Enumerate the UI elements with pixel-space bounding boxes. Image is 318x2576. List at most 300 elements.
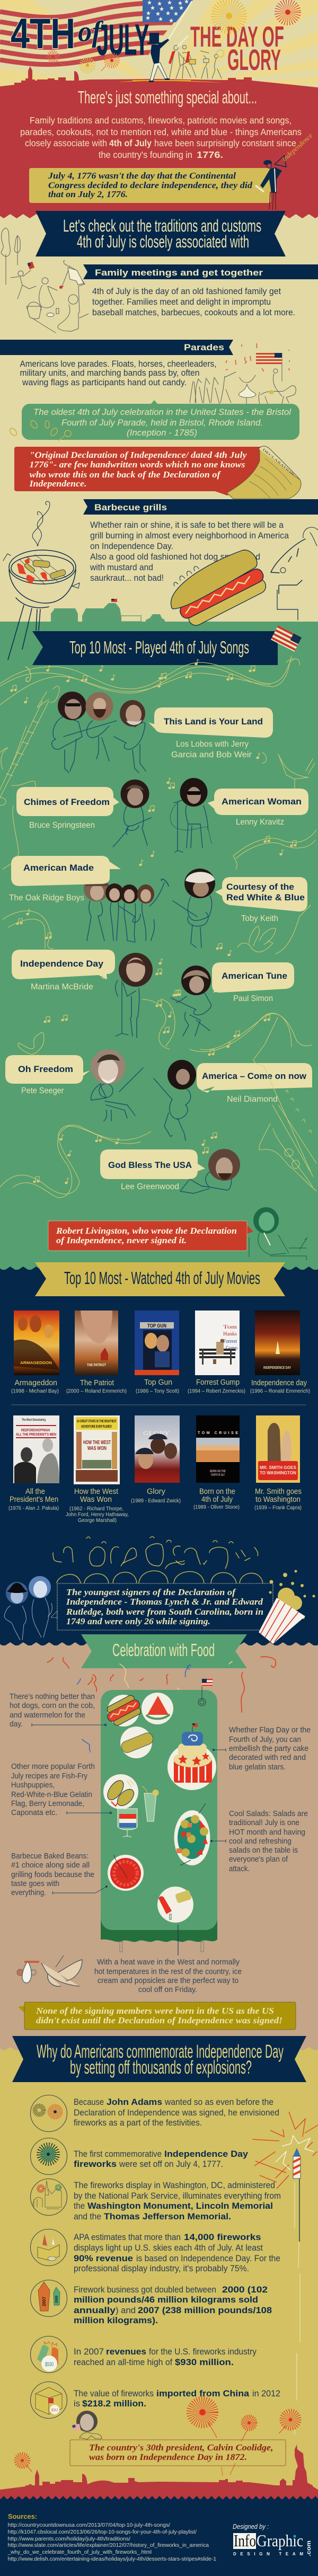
- poster: TO WASHINGTON: [260, 1471, 296, 1475]
- text block: hot dogs: There's nothing better than: [10, 1693, 95, 1701]
- song: Courtesy of the Red White & Blue: [173, 869, 307, 948]
- movie: How the West Was Won: How the West: [74, 1487, 119, 1496]
- singer illustration: [170, 800, 212, 852]
- song: American Tune: American Tune: [222, 971, 287, 981]
- callout: youngest signers: Rutledge, both were from South Carolina, born in: [66, 1607, 263, 1617]
- portraits: Oak Ridge Boys: [84, 876, 154, 904]
- decorative zigzag top of tan: [0, 1642, 318, 1646]
- song: American Tune: [171, 962, 294, 1036]
- parade flag: [256, 353, 282, 364]
- fact: business doubled: ) and: [116, 2306, 136, 2315]
- poster: TOM CRUISE: [198, 1431, 238, 1435]
- poster: GLORY: [143, 1429, 170, 1437]
- fact: Washington display: the: [74, 2201, 85, 2211]
- fact: China imports: is: [74, 2399, 80, 2409]
- icon: flag toothpick: [198, 1679, 213, 1706]
- movie: Independence Day: [250, 1311, 310, 1394]
- text block: parades: Americans love parades. Floats, horses, cheerleaders,: [20, 359, 216, 369]
- movie: Top Gun: [135, 1311, 179, 1394]
- poster: ARMAGEDDON: [20, 1361, 52, 1365]
- illustration: bird and clef: [257, 753, 315, 790]
- movie: How the West Was Won: [66, 1415, 129, 1524]
- song: This Land is Your Land: This Land is Your Land: [164, 716, 263, 727]
- song: God Bless The USA: Lee Greenwood: [121, 1182, 179, 1191]
- fact: John Adams: Because: [74, 2097, 104, 2107]
- guitarist illustration: [173, 896, 212, 948]
- movie: The Patriot: (2000 – Roland Emmerich): [66, 1388, 127, 1394]
- banner: traditions heading: [36, 211, 286, 256]
- decorative cream zigzag over red: [0, 214, 318, 218]
- section: green songs background: [0, 622, 318, 1271]
- reclining figure illustration: [180, 1170, 232, 1193]
- icon: monuments badge: [31, 2179, 67, 2215]
- song: American Tune: Paul Simon: [233, 994, 273, 1003]
- portrait: Paul Simon: [181, 966, 211, 995]
- text block: baked beans: grilling foods because the: [11, 1871, 94, 1879]
- callout: declaration red box: [14, 447, 262, 495]
- callout: signing members: didn't exist until the Declaration of Independence was signed!: [36, 2015, 282, 2025]
- movie: All the President's Men: President's Men: [10, 1495, 58, 1504]
- text block: recipes: Red-White-n-Blue Gelatin: [11, 1791, 92, 1799]
- illustration: parade with flag and horse: [190, 343, 296, 405]
- fact: China imports: $218.2 million.: [82, 2399, 146, 2409]
- poster: TOP GUN: [147, 1323, 166, 1329]
- text block: parades: waving flags as participants hand out candy.: [22, 378, 187, 387]
- text block: recipes: July recipes are Fish-Fry: [11, 1772, 88, 1781]
- callout: July 4 fact: that on July 2, 1776.: [48, 189, 128, 199]
- callout: Robert Livingston: of Independence, never signed it.: [56, 1235, 187, 1245]
- icon: declaration scroll: DECLARATION: [262, 448, 295, 477]
- poster: [13, 1415, 59, 1483]
- fact: business doubled: million kilograms).: [74, 2316, 158, 2325]
- divider: movie rows: [12, 1404, 306, 1405]
- text block: intro: closely associate with: [25, 138, 107, 148]
- callout: oldest celebration: Fourth of July Parade, held in Bristol, Rhode Island.: [61, 418, 263, 428]
- header: marching band illustration: [118, 1, 224, 83]
- sources block: http://k1047.cbslocal.com/2013/06/26/top-10-songs-for-your-4th-of-july-playlist/: [7, 2529, 197, 2535]
- movie: Armageddon: [11, 1311, 59, 1394]
- poster: THE PATRIOT: [87, 1364, 107, 1367]
- portrait: Neil Diamond: [167, 1060, 196, 1090]
- callout: oldest celebration: The oldest 4th of July celebration in the United States - the Bristol: [33, 407, 292, 417]
- fact: first fireworks: [31, 2138, 249, 2175]
- song: America Come on now: Neil Diamond: [227, 1095, 278, 1104]
- icon: baby Calvin Coolidge: [72, 2411, 102, 2439]
- fact: John Adams: fireworks as a part of the festivities.: [74, 2118, 202, 2128]
- fact: John Adams: Declaration of Independence was signed, he envisioned: [74, 2108, 279, 2118]
- poster: [14, 1311, 59, 1375]
- icon: money bag badge: $930: [45, 2361, 54, 2368]
- decorative zigzag top of navy: [0, 1267, 318, 1271]
- sources block: _why_do_we_celebrate_fourth_of_july_with_fireworks_.html: [7, 2549, 152, 2555]
- fact: China imports: in 2012: [252, 2389, 280, 2398]
- movie: The Patriot: [66, 1311, 127, 1394]
- callout: signing members: None of the signing members were born in the US as the US: [36, 2006, 274, 2016]
- song: Chimes of Freedom: Chimes of Freedom: [24, 797, 110, 807]
- trumpet player: [169, 36, 188, 78]
- callout: July 4 fact: Congress decided to declare independence, they did: [48, 180, 253, 190]
- text block: salads: attack.: [229, 1865, 250, 1873]
- mini flag: [28, 262, 34, 269]
- text block: baked beans: Barbecue Baked Beans:: [11, 1852, 89, 1861]
- movie: Armageddon: (1998 - Michael Bay): [11, 1388, 59, 1394]
- song: Courtesy of the Red White & Blue: Red White & Blue: [226, 892, 305, 902]
- song: Independence Day: [12, 950, 153, 1038]
- portrait: Martina McBride: [119, 953, 153, 987]
- poster: WAS WON: [87, 1446, 107, 1451]
- movie: Top Gun: Top Gun: [144, 1378, 172, 1387]
- song: This Land is Your Land: Los Lobos with Jerry: [176, 740, 249, 749]
- callout: Robert Livingston: Robert Livingston, who wrote the Declaration: [56, 1226, 237, 1236]
- icon: box from China badge: $218.2: [51, 2409, 58, 2412]
- speech bubble: [148, 707, 273, 738]
- illustration: staff lines and small notes: [18, 959, 312, 1060]
- poster: [195, 1311, 240, 1375]
- poster: [255, 1311, 300, 1375]
- text block: parades: [20, 359, 216, 387]
- text block: family: [92, 287, 295, 317]
- text block: barbecue: saurkraut... not bad!: [90, 573, 164, 583]
- text block: barbecue: Whether rain or shine, it is safe to bet there will be a: [90, 520, 284, 530]
- callout: Calvin Coolidge: [70, 2440, 286, 2466]
- plate: corn: [120, 1727, 155, 1758]
- movie: Independence Day: (1996 – Ronald Emmerich): [250, 1388, 310, 1394]
- fact: first fireworks: were set off on July 4, 1777.: [119, 2159, 223, 2169]
- subtitle: The Day of Glory: [190, 20, 284, 76]
- text block: salads: cool and refreshing: [229, 1837, 292, 1846]
- movie: Born on the 4th of July: (1989 - Oliver Stone): [193, 1504, 240, 1510]
- text block: cake: embellish the party cake: [229, 1745, 308, 1753]
- movie: Mr. Smith goes to Washington: Mr. Smith goes: [255, 1487, 302, 1496]
- text block: cake: decorated with red and: [229, 1754, 306, 1762]
- movie: Independence Day: Independence day: [251, 1378, 307, 1387]
- callout: declaration red box: "Original Declaration of Independence/ dated 4th July: [30, 450, 247, 460]
- icon: candies: [8, 420, 71, 441]
- icon: rocket burst: [252, 2112, 318, 2435]
- text block: recipes: Caponata etc.: [11, 1809, 57, 1817]
- text block: family: baseball matches, barbecues, cookouts and a lot more.: [92, 308, 295, 317]
- portrait: Bob Weir: [120, 700, 145, 727]
- text block: salads: HOT month and having: [229, 1828, 305, 1837]
- musicians illustration: [52, 716, 146, 773]
- fact: revenues: reached an all-time high of: [74, 2358, 172, 2367]
- movie: Born on the 4th of July: [193, 1415, 240, 1510]
- illustration: hot dog: [160, 540, 271, 632]
- poster: INDEPENDENCE DAY: [263, 1366, 291, 1370]
- song: This Land is Your Land: Garcia and Bob Weir: [171, 750, 252, 759]
- footer: navy background: [0, 2499, 318, 2576]
- song: Courtesy of the Red White & Blue: Toby Keith: [241, 914, 278, 923]
- poster: Gump: [226, 1345, 237, 1351]
- icon: fireworks badge: [31, 2095, 67, 2131]
- poster: ALL THE PRESIDENT'S MEN: [16, 1433, 56, 1437]
- portrait: Lenny Kravitz: [180, 778, 208, 807]
- flag pole: [169, 1, 192, 39]
- fact: China imports: imported from China: [156, 2389, 250, 2398]
- fact: revenues: [31, 2336, 257, 2373]
- text block: cake: Whether Flag Day or the: [229, 1726, 311, 1734]
- seated banjo player illustration: [91, 1068, 143, 1121]
- drummer: [182, 46, 196, 78]
- icon: rockets badge: 2000: [55, 2296, 59, 2303]
- callout: declaration red box: who wrote this on the back of the Declaration of: [30, 470, 222, 480]
- plate: fish fry: [103, 1774, 138, 1809]
- header: sun rays: [0, 0, 318, 90]
- plate: cake: [167, 1723, 216, 1790]
- plate: salad: [174, 1803, 210, 1865]
- fact: China imports: [31, 2382, 280, 2419]
- illustration: guitar neck left: [0, 686, 59, 869]
- movie: Glory: [131, 1415, 181, 1504]
- text block: salads: everyone's plan of: [229, 1855, 288, 1864]
- icon: popcorn box: [259, 1570, 315, 1644]
- icon: box of fireworks badge: [31, 2229, 67, 2266]
- fact: China imports: The value of fireworks: [74, 2389, 154, 2398]
- tuba player: [212, 50, 224, 78]
- poster: BORN ON THE: [210, 1470, 226, 1473]
- movie: All the President's Men: (1976 - Alan J. Pakula): [8, 1505, 59, 1511]
- singer illustration: [116, 980, 139, 1038]
- movie: Mr. Smith goes to Washington: [254, 1415, 302, 1511]
- decorative zigzag red to navy: [0, 2496, 318, 2500]
- text block: cake: Fourth of July, you can: [229, 1736, 301, 1744]
- illustration: theater audience: [53, 1537, 263, 1583]
- icon: money bag badge: [31, 2336, 67, 2373]
- designer logo: Designed by :: [233, 2522, 269, 2530]
- song: God Bless The USA: [100, 1149, 240, 1193]
- glass: gelatin flag: [118, 1809, 137, 1837]
- designer logo: DESIGN TEAM: [233, 2552, 303, 2556]
- text block: recipes: Hushpuppies,: [11, 1781, 55, 1790]
- guitarist illustration: [154, 1078, 191, 1140]
- fact: Washington display: Washington Monument, Lincoln Memorial: [87, 2201, 273, 2211]
- portrait: Bruce Springsteen: [121, 780, 149, 808]
- callout: oldest celebration: (Inception - 1785): [127, 428, 197, 438]
- decorative zigzag top of yellow: [0, 2047, 318, 2051]
- text block: ice cream: cool off on Friday.: [138, 1986, 197, 1994]
- movie: Forrest Gump: (1994 – Robert Zemeckis): [188, 1388, 245, 1394]
- song: America Come on now: [154, 1060, 312, 1140]
- standing father: [61, 261, 85, 313]
- illustration: lines and dove: [3, 905, 311, 956]
- fact: revenues: revenues: [106, 2347, 146, 2357]
- callout: youngest signers: The youngest signers of the Declaration of: [66, 1587, 236, 1597]
- song: American Woman: [170, 778, 308, 852]
- icon: rockets badge: [31, 2280, 67, 2317]
- poster: [256, 1415, 300, 1483]
- banner: Celebration with Food: [81, 1634, 247, 1668]
- song: American Made: [9, 856, 169, 942]
- fact: business doubled: 2007 (238 million pounds/108: [138, 2306, 272, 2315]
- song: Oh Freedom: Pete Seeger: [21, 1086, 64, 1095]
- seated child: [68, 295, 78, 304]
- banner: Top 10 songs: [32, 631, 278, 665]
- movie: Armageddon: Armageddon: [15, 1378, 57, 1387]
- fact: first fireworks: fireworks: [74, 2159, 117, 2169]
- section: yellow fireworks background: [0, 2050, 318, 2495]
- sources block: [7, 2512, 216, 2562]
- callout: declaration red box: Independence.: [29, 479, 87, 489]
- text block: barbecue: with mustard and: [90, 563, 153, 572]
- table with foods: [101, 1679, 217, 1952]
- movie: Forrest Gump: [188, 1311, 245, 1394]
- callout: oldest celebration: [22, 400, 299, 440]
- icon: confetti: [47, 1657, 276, 1752]
- text block: cake: blue gelatin stars.: [229, 1763, 286, 1772]
- text block: intro: the country's founding in: [99, 149, 192, 160]
- movie: How the West Was Won: Was Won: [80, 1495, 112, 1504]
- text block: hot dogs: hot dogs, corn on the cob,: [10, 1702, 95, 1710]
- icon: man with megaphone: independence: [280, 131, 314, 163]
- song: Oh Freedom: [5, 1049, 143, 1121]
- fact: first fireworks: Independence Day: [164, 2149, 249, 2159]
- illustration: lower-left staff: [0, 1125, 217, 1198]
- title: 4TH of JULY: of: [78, 15, 104, 48]
- illustration: family picnic: [11, 261, 89, 333]
- poster: Tom: [223, 1324, 237, 1330]
- banner: Parades: Parades: [184, 342, 224, 352]
- fact: APA estimates: [31, 2229, 280, 2273]
- callout: Calvin Coolidge: was born on Independence Day in 1872.: [89, 2452, 247, 2462]
- text block: baked beans: everything.: [11, 1889, 46, 1897]
- bird: [18, 1032, 44, 1060]
- illustration: saxophone: [253, 1017, 316, 1191]
- header: flag with waving stripes: [0, 0, 193, 65]
- tablecloth: [101, 1908, 217, 1942]
- seated mother: [42, 278, 48, 284]
- song: Chimes of Freedom: Bruce Springsteen: [29, 821, 95, 830]
- flag bearer: [147, 33, 170, 82]
- poster: The Most Devastating: [22, 1419, 46, 1422]
- treble clefs: [25, 667, 31, 681]
- callout: July 4 fact: July 4, 1776 wasn't the day that the Continental: [48, 171, 236, 181]
- flag canton: [143, 0, 193, 23]
- poster: [75, 1311, 118, 1375]
- movie: How the West Was Won: (1962 - Richard Thorpe,: [69, 1506, 123, 1512]
- designer logo: .com: [306, 2540, 312, 2556]
- song: Oh Freedom: Oh Freedom: [18, 1064, 73, 1074]
- fact: Washington display: The fireworks display in Washington, DC, administered: [74, 2181, 275, 2190]
- song: America Come on now: America – Come on now: [202, 1071, 307, 1081]
- sources block: http://countrycountdownusa.com/2013/07/04/top-10-july-4th-songs/: [7, 2522, 170, 2528]
- musician: [200, 51, 209, 78]
- illustration: musical notes mid: [139, 778, 316, 869]
- text block: intro: have been surprisingly constant since: [154, 138, 296, 148]
- text block: intro: [20, 115, 302, 160]
- text block: salads: [210, 1810, 308, 1873]
- fact: APA estimates: professional display industry, it's probably 75%.: [74, 2264, 249, 2273]
- text block: baked beans: [11, 1852, 108, 1897]
- poster: REDFORD/HOFFMAN: [21, 1429, 50, 1432]
- poster: HOW THE WEST: [83, 1440, 111, 1446]
- text block: intro: parades, cookouts, not to mention red, white and blue - things Americans: [20, 127, 302, 137]
- text block: salads: Cool Salads: Salads are: [229, 1810, 308, 1818]
- illustration: barbecue grill: [3, 501, 80, 660]
- illustration: man face profile: [271, 527, 318, 620]
- song: Independence Day: Independence Day: [20, 959, 104, 969]
- fact: John Adams: wanted so as even before the: [164, 2097, 273, 2107]
- poster: Hanks: [223, 1331, 237, 1336]
- portrait: Los Lobos: [58, 692, 86, 720]
- fact: John Adams: [31, 2095, 279, 2131]
- fact: revenues: In 2007: [74, 2347, 104, 2357]
- fact: business doubled: million pounds/46 million kilograms sold: [74, 2295, 258, 2305]
- seated guitarist illustration: [171, 992, 211, 1036]
- icon: box from China badge: [31, 2382, 67, 2419]
- text: JULY: [97, 16, 149, 64]
- movie: Forrest Gump: Forrest Gump: [196, 1378, 240, 1387]
- portrait: Toby Keith: [184, 869, 215, 898]
- callout: youngest signers: 1749 and were only 26 while signing.: [66, 1616, 210, 1626]
- text block: salads: traditional! July is one: [229, 1819, 299, 1827]
- title: 4TH of JULY: 4TH: [11, 10, 75, 58]
- callout: youngest signers: [51, 1583, 273, 1630]
- icon: rockets badge: 2007: [42, 2296, 47, 2306]
- fact: revenues: $930 million.: [175, 2358, 234, 2367]
- glass: lemonade: [142, 1786, 159, 1821]
- fact: Washington display: [31, 2179, 281, 2221]
- designer logo: Info: [234, 2531, 256, 2550]
- portrait: Jerry Garcia: [86, 692, 113, 721]
- fact: revenues: for the U.S. fireworks industry: [149, 2347, 257, 2357]
- sources block: Sources:: [8, 2512, 37, 2520]
- callout: youngest signers: Independence - Thomas Lynch & Jr. and Edward: [66, 1597, 263, 1607]
- callout: July 4 fact: [29, 168, 271, 203]
- icon: signers portraits: [4, 1576, 52, 1640]
- icon: fireworks bottom: [17, 2403, 297, 2476]
- connector: popsicle to text: [178, 1925, 179, 1955]
- movie: The Patriot: The Patriot: [80, 1378, 114, 1387]
- text block: parades: military units, and marching bands pass by, often: [20, 368, 199, 378]
- text block: recipes: Other more popular Forth: [11, 1763, 95, 1771]
- blanket: [32, 314, 89, 333]
- illustration: houses silhouette: [51, 599, 165, 623]
- portrait: Lee Greenwood: [208, 1149, 240, 1181]
- movie: All the President's Men: All the: [25, 1487, 45, 1496]
- poster: [135, 1311, 179, 1375]
- banner: Celebration with Food: Celebration with Food: [112, 1640, 215, 1660]
- text block: ice cream: [94, 1958, 242, 1994]
- footer: red hill with skyline and statue: [0, 2445, 318, 2499]
- banner: Parades: [0, 340, 233, 355]
- poster: 24 GREAT STARS IN THE MIGHTIEST: [77, 1420, 117, 1423]
- banner: why explosions: [12, 2036, 306, 2082]
- illustration: trees: [1, 228, 20, 285]
- movie: Born on the 4th of July: Born on the: [199, 1487, 235, 1496]
- text block: recipes: [11, 1763, 112, 1817]
- sources block: http://www.slate.com/articles/life/explainer/2012/07/history_of_fireworks_in_america: [7, 2542, 209, 2548]
- confetti: [226, 343, 289, 371]
- table legs: [120, 1942, 204, 1952]
- movie: Mr. Smith goes to Washington: (1939 – Frank Capra): [254, 1504, 302, 1511]
- icon: man with megaphone: [255, 131, 314, 210]
- text block: intro: 4th of July: [109, 138, 152, 148]
- text block: intro: 1776.: [197, 149, 223, 160]
- sources block: http://www.parents.com/holiday/july-4th/traditions/: [7, 2536, 130, 2542]
- banner: Top 10 movies: [35, 1262, 285, 1296]
- group illustration: [87, 879, 169, 942]
- text block: hot dogs: day.: [10, 1720, 23, 1729]
- poster: ADVENTURE EVER FILMED!: [81, 1425, 112, 1429]
- designer logo: [233, 2522, 312, 2556]
- fact: business doubled: Firework business got doubled between: [74, 2285, 216, 2295]
- header: red hill with skyline: [0, 66, 318, 218]
- sources block: http://www.delish.com/entertaining-ideas/holidays/july-4th/desserts-stars-stripes#slide-1: [7, 2556, 216, 2562]
- fact: business doubled: [31, 2280, 272, 2325]
- poster: [135, 1415, 180, 1483]
- plate: watermelon: [142, 1693, 173, 1724]
- title: 4TH of JULY: [11, 10, 149, 64]
